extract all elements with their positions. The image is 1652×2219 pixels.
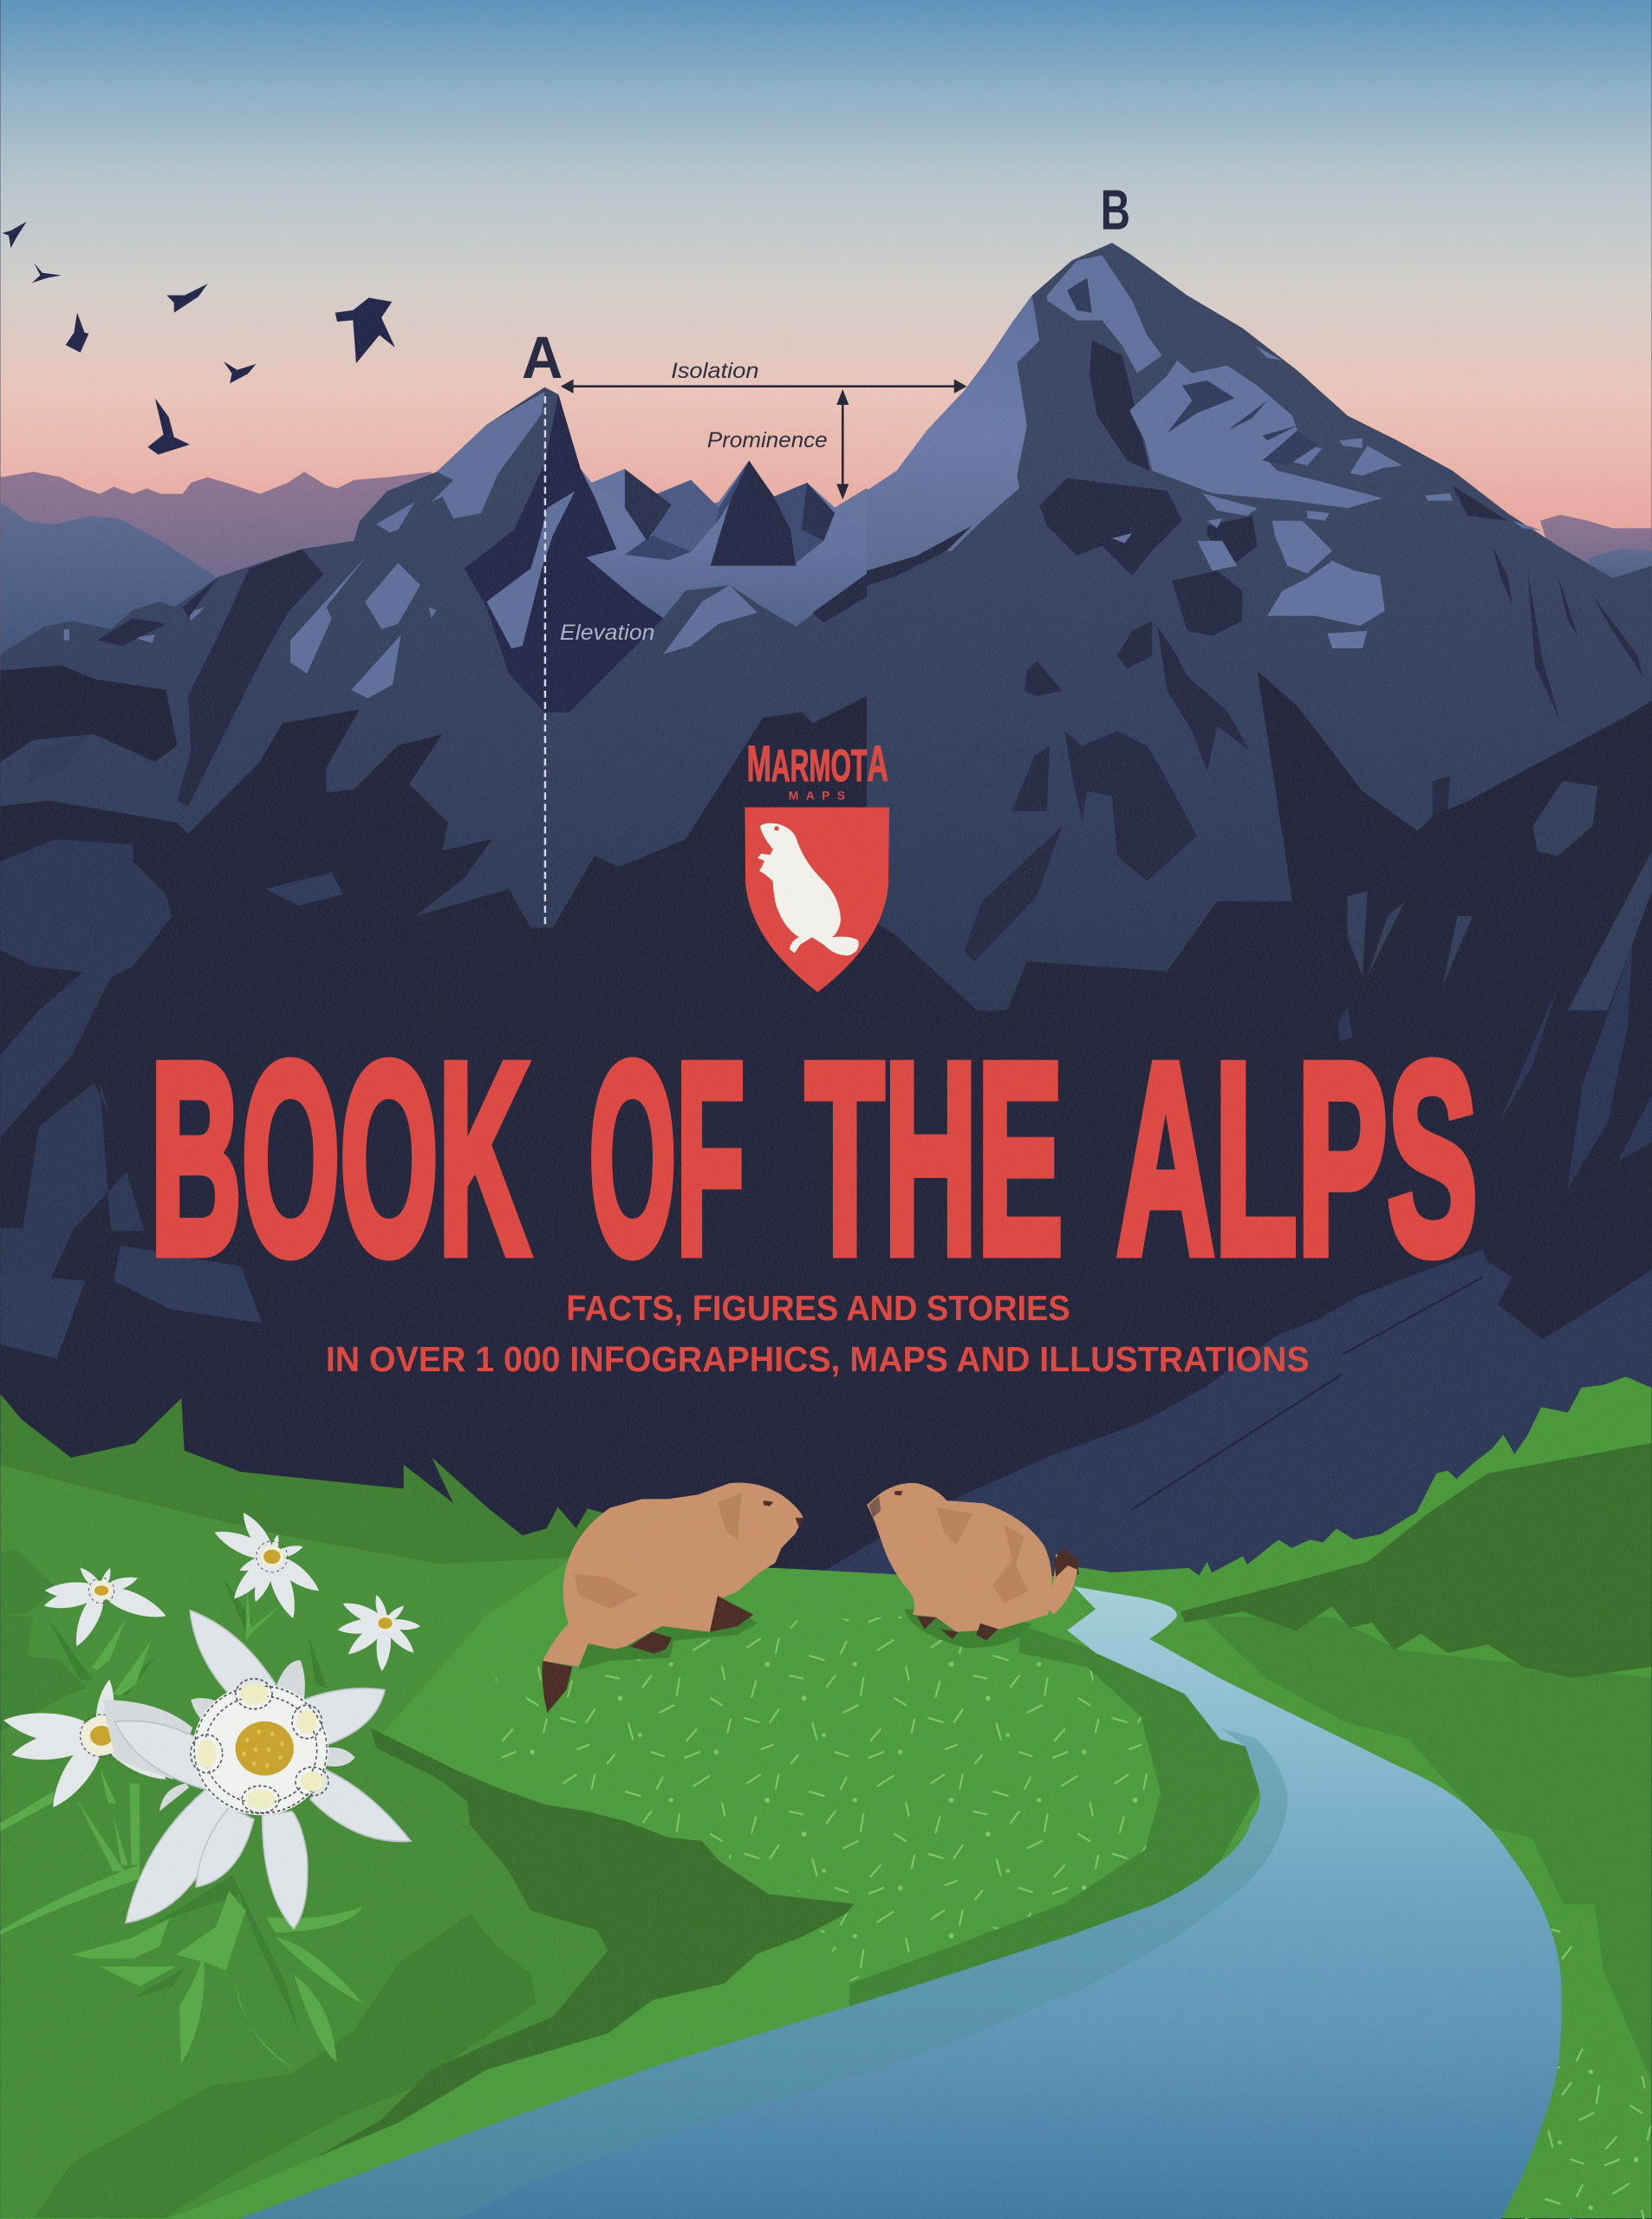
- elevation label: Elevation: [560, 621, 654, 645]
- back grass ridge left: [0, 1394, 608, 1585]
- isolation arrow: [561, 380, 966, 394]
- logo wordmark: MARMOTA: [747, 736, 888, 792]
- right marmot: [867, 1483, 1078, 1648]
- main title: [150, 1007, 1478, 1311]
- right bank with tufted edge: [1078, 1376, 1652, 2218]
- Marmota Maps logo: [745, 736, 889, 992]
- dark edge below the col: [813, 573, 868, 622]
- peak label B: B: [1101, 178, 1130, 241]
- blue streaks above the slope: [1337, 940, 1652, 1188]
- middle blue ridges: [0, 502, 1652, 662]
- dark foreground on the left: [0, 665, 177, 762]
- dark foreground on the right: [867, 671, 1652, 1011]
- dark valley base: [0, 906, 1652, 1613]
- main meadow foreground: [0, 1562, 1259, 2219]
- flecks on the lower right bank: [1514, 1859, 1652, 2219]
- meadow outer band: [849, 1624, 1263, 2017]
- blue patches lower left: [28, 734, 343, 906]
- main title: THE: [805, 1007, 1063, 1311]
- ridge line: [1132, 1278, 1483, 1509]
- main title: BOOK: [150, 1007, 530, 1311]
- blue streaks on the right: [1348, 781, 1652, 1011]
- dark hill right: [1180, 1443, 1652, 1678]
- flower top right: [336, 1593, 421, 1672]
- blue slope: [816, 1250, 1652, 1575]
- back petals: [103, 1660, 355, 1812]
- lit col: [581, 460, 868, 627]
- dark bottom shadow: [34, 1914, 537, 2218]
- birds: [3, 222, 395, 454]
- left marmot: [542, 1483, 803, 1713]
- subtitle line 2: IN OVER 1 000 INFOGRAPHICS, MAPS AND ILLUSTRATIONS: [326, 1339, 1310, 1379]
- leaves and stems: [0, 1577, 363, 2070]
- lit west face: [867, 296, 1039, 570]
- front petals: [114, 1611, 411, 1929]
- shadows on lower left meadow: [0, 1728, 854, 2218]
- subtitle line 1: FACTS, FIGURES AND STORIES: [566, 1288, 1070, 1328]
- far mountain ridges: [0, 472, 1652, 641]
- dark right face of peak A: [465, 394, 663, 713]
- flower left: [2, 1678, 187, 1814]
- left ground: [0, 1465, 1274, 2219]
- prominence label: Prominence: [707, 428, 828, 452]
- edelweiss flowers: [0, 1508, 421, 2070]
- yellow disc: [236, 1721, 294, 1775]
- flower top middle: [211, 1508, 324, 1622]
- peak A massif: [0, 387, 868, 1231]
- elevation dashed line: [544, 396, 546, 927]
- mid-tone bank: [1203, 1617, 1652, 2081]
- logo shield with marmot: [745, 807, 889, 992]
- alpine meadow: [0, 1376, 1652, 2219]
- flower top left: [42, 1565, 170, 1650]
- lower left ground shade: [0, 1728, 608, 2218]
- crevasses in the snow: [1067, 278, 1317, 465]
- main title: OF: [589, 1007, 745, 1311]
- lower left taper: [0, 1228, 74, 1295]
- meadow flecks: [496, 1613, 1161, 1981]
- peak B massif: [867, 243, 1652, 1011]
- spires in the col: [595, 460, 835, 566]
- lower left blue patches: [0, 1246, 262, 1358]
- darker left patches: [0, 1550, 87, 1732]
- snow on peak A: [64, 392, 758, 699]
- river: [238, 1586, 1562, 2219]
- sky: [0, 0, 1652, 680]
- right meadow ground: [1078, 1376, 1652, 2218]
- peak label A: A: [522, 324, 563, 391]
- cream buds: [197, 1683, 324, 1809]
- long ridge shadow: [315, 1728, 854, 2157]
- dark shadows on peak B: [867, 341, 1642, 961]
- snow on peak B: [1047, 256, 1543, 648]
- woolly hairs: [191, 1679, 328, 1813]
- dark rock ribs on the left: [97, 549, 323, 806]
- white centre: [192, 1684, 328, 1815]
- prominence arrow: [836, 389, 849, 499]
- dark ribs lower left: [0, 950, 133, 1231]
- shallow band in river: [238, 1728, 1287, 2219]
- isolation label: Isolation: [671, 359, 758, 383]
- peak B silhouette: [867, 243, 1652, 1011]
- ground under the river head: [991, 1568, 1557, 2123]
- blue ground lower left: [0, 839, 172, 1231]
- large flower: [103, 1611, 411, 1929]
- peak A silhouette: [0, 387, 868, 1231]
- lower right slope: [816, 940, 1652, 1575]
- logo subline: MAPS: [789, 788, 845, 802]
